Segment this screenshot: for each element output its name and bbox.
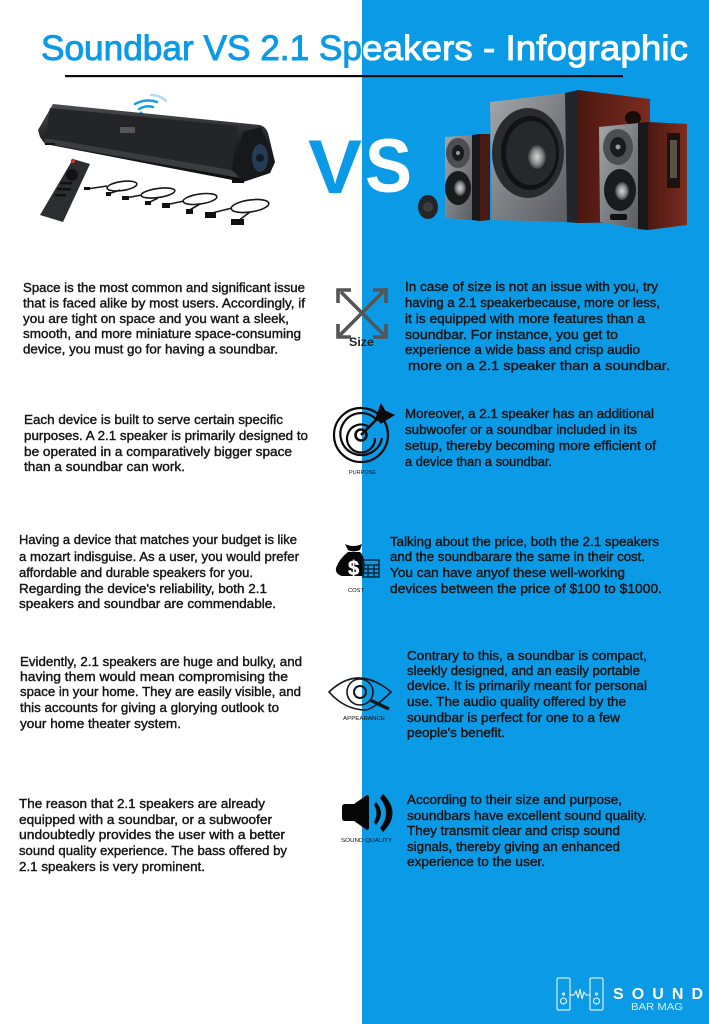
cost label: COST [348, 588, 365, 594]
right text: purpose: a device than a soundbar. [405, 454, 552, 469]
right text: sound quality: signals, thereby giving an enhanced [407, 839, 620, 854]
icon: money bag and calculator: $ [348, 558, 359, 580]
right text: appearance: people's benefit. [407, 725, 505, 740]
logo: Sound Bar Mag [557, 978, 703, 1013]
row 2: purpose [24, 404, 656, 476]
right satellite speaker [648, 122, 687, 230]
right text: size: having a 2.1 speakerbecause, more or less, [405, 295, 660, 310]
VS heading: S [365, 124, 412, 209]
icon: target [334, 404, 394, 462]
left text: bass: equipped with a soundbar, or a subwoofer [19, 812, 273, 827]
wifi icon [135, 95, 166, 114]
title [41, 29, 688, 68]
title underline [65, 75, 623, 77]
right text: appearance: Contrary to this, a soundbar is compact, [407, 648, 647, 663]
left text: space: that is faced alike by most users. Accordingly, if [23, 296, 305, 310]
blue right background panel [362, 0, 709, 1024]
right text: size [405, 279, 670, 373]
remote control [40, 159, 90, 222]
icon: size arrows [338, 290, 386, 337]
right text: purpose [405, 406, 656, 469]
right text: cost: You can have anyof these well-working [390, 565, 625, 580]
left text: bulky: your home theater system. [20, 716, 181, 731]
right text: sound quality [407, 792, 647, 869]
right text: appearance: device. It is primarily meant for personal [407, 678, 647, 693]
right text: appearance: soundbar is perfect for one to a few [407, 710, 621, 725]
left text: purposes: than a soundbar can work. [24, 459, 185, 474]
right text: size: soundbar. For instance, you get to [405, 327, 618, 342]
row 1: size [23, 279, 670, 373]
left text: budget: speakers and soundbar are commendable. [19, 596, 276, 611]
right text: cost: and the soundbarare the same in their cost. [390, 549, 645, 564]
title: eakers - Infographic [362, 29, 688, 68]
right text: cost [390, 534, 662, 596]
sound quality label: SOUND QUALITY [341, 838, 392, 844]
VS heading [308, 124, 412, 210]
icon: speaker volume [342, 794, 392, 832]
left text: bulky: space in your home. They are easily visible, and [20, 684, 301, 699]
right text: sound quality: According to their size and purpose, [407, 792, 622, 807]
left text: purposes: Each device is built to serve certain specific [24, 412, 284, 427]
size label: Size [349, 335, 374, 349]
right text: size: more on a 2.1 speaker than a soundbar. [408, 358, 670, 373]
right text: size: it is equipped with more features than a [405, 311, 646, 326]
right text: purpose: Moreover, a 2.1 speaker has an additional [405, 406, 654, 421]
right text: appearance: sleekly designed, and an easily portable [407, 663, 640, 678]
logo icon: speakers and waveform [557, 978, 603, 1010]
left text: space: Space is the most common and significant issue [23, 280, 305, 295]
left text: budget: Regarding the device's reliability, both 2.1 [19, 581, 267, 596]
right text: sound quality: soundbars have excellent sound quality. [407, 808, 647, 823]
title: Soundbar VS 2.1 Sp [41, 29, 362, 68]
right text: size: In case of size is not an issue with you, try [405, 279, 659, 294]
left text: space: smooth, and more miniature space-consuming [23, 326, 301, 341]
2.1 speakers product photo [418, 90, 687, 230]
logo wordmark: SOUND [613, 986, 703, 1003]
soundbar product photo [38, 95, 275, 225]
control puck [418, 195, 438, 219]
soundbar body [38, 104, 275, 182]
right text: cost: Talking about the price, both the 2.1 speakers [390, 534, 660, 549]
right text: appearance [407, 648, 647, 740]
left text: budget [19, 532, 300, 611]
VS heading: V [308, 125, 362, 210]
right text: appearance: use. The audio quality offered by the [407, 694, 626, 709]
left text: space [23, 280, 305, 356]
logo subtitle: BAR MAG [631, 1002, 683, 1013]
subwoofer [578, 90, 650, 223]
left text: bulky: Evidently, 2.1 speakers are huge and bulky, and [20, 654, 302, 669]
icon: money bag and calculator [336, 544, 379, 580]
left text: bulky [20, 654, 302, 731]
row 3: cost [19, 532, 662, 611]
left text: bass: 2.1 speakers is very prominent. [19, 859, 205, 874]
left text: bass: The reason that 2.1 speakers are already [19, 796, 266, 811]
left text: budget: a mozart indisguise. As a user, you would prefer [19, 549, 300, 564]
left satellite speaker [480, 134, 490, 221]
left text: space: device, you must go for having a soundbar. [23, 342, 278, 356]
right text: size: experience a wide bass and crisp audio [405, 342, 640, 357]
row 4: appearance [20, 648, 647, 740]
right text: sound quality: They transmit clear and crisp sound [407, 823, 620, 838]
left text: bass [19, 796, 287, 874]
left text: bass: sound quality experience. The bass offered by [19, 843, 287, 858]
right text: sound quality: experience to the user. [407, 854, 545, 869]
icon: eye with magnifier [329, 678, 391, 710]
left text: purposes: purposes. A 2.1 speaker is primarily designed to [24, 428, 308, 443]
left text: bulky: this accounts for giving a glorying outlook to [20, 700, 279, 715]
left text: budget: Having a device that matches your budget is like [19, 532, 297, 547]
right text: purpose: setup, thereby becoming more efficient of [405, 438, 656, 453]
left text: space: you are tight on space and you want a sleek, [23, 311, 289, 326]
right text: purpose: subwoofer or a soundbar included in its [405, 422, 638, 437]
left text: purposes: be operated in a comparatively bigger space [24, 444, 292, 459]
purpose label: PURPOSE [349, 470, 376, 476]
left text: purposes [24, 412, 308, 474]
cables [87, 179, 270, 221]
left text: bulky: having them would mean compromising the [20, 669, 288, 684]
appearance label: APPEARANCE [343, 716, 385, 722]
left text: budget: affordable and durable speakers for you. [19, 565, 253, 580]
row 5: sound quality [19, 792, 647, 874]
right text: cost: devices between the price of $100 to $1000. [390, 581, 662, 596]
left text: bass: undoubtedly provides the user with a better [19, 827, 286, 842]
